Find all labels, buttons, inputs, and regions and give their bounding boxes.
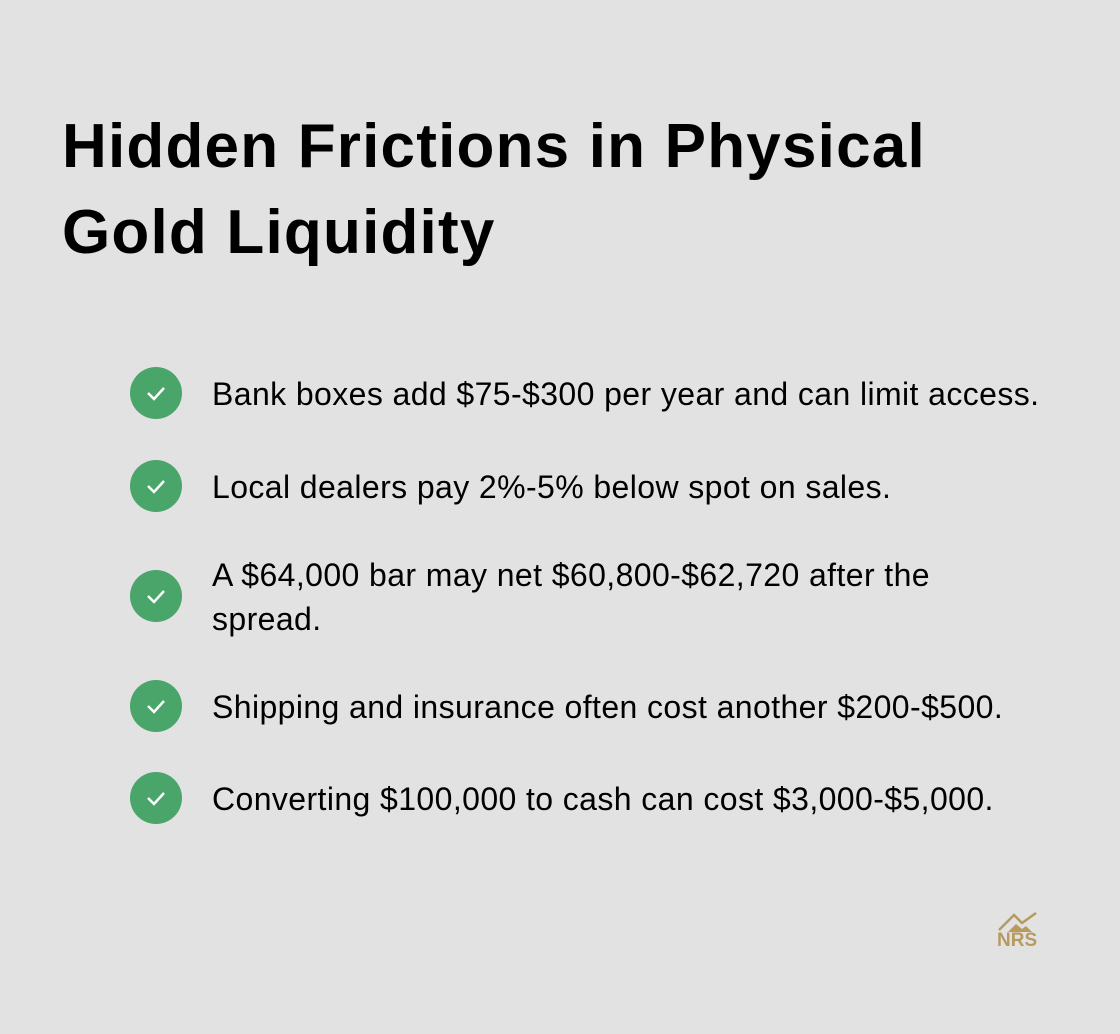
icon: check	[130, 772, 182, 824]
title	[62, 112, 926, 267]
text: Converting $100,000 to cash can cost $3,000-$5,000.	[212, 781, 994, 817]
icon: check	[130, 570, 182, 622]
title: Hidden Frictions in Physical	[62, 112, 926, 181]
icon: check	[130, 680, 182, 732]
logo: NRS: NRS	[997, 930, 1037, 951]
text: Shipping and insurance often cost another $200-$500.	[212, 689, 1003, 725]
title: Gold Liquidity	[62, 198, 496, 267]
item 5	[130, 772, 994, 824]
item 4	[130, 680, 1003, 732]
item 2	[130, 460, 891, 512]
item 1	[130, 367, 1039, 419]
logo: NRS	[997, 912, 1037, 951]
text: Local dealers pay 2%-5% below spot on sales.	[212, 469, 891, 505]
icon: check	[130, 367, 182, 419]
icon: check	[130, 460, 182, 512]
text: A $64,000 bar may net $60,800-$62,720 after the spread.	[212, 557, 930, 637]
text: Bank boxes add $75-$300 per year and can limit access.	[212, 376, 1039, 412]
item 3	[130, 557, 930, 637]
